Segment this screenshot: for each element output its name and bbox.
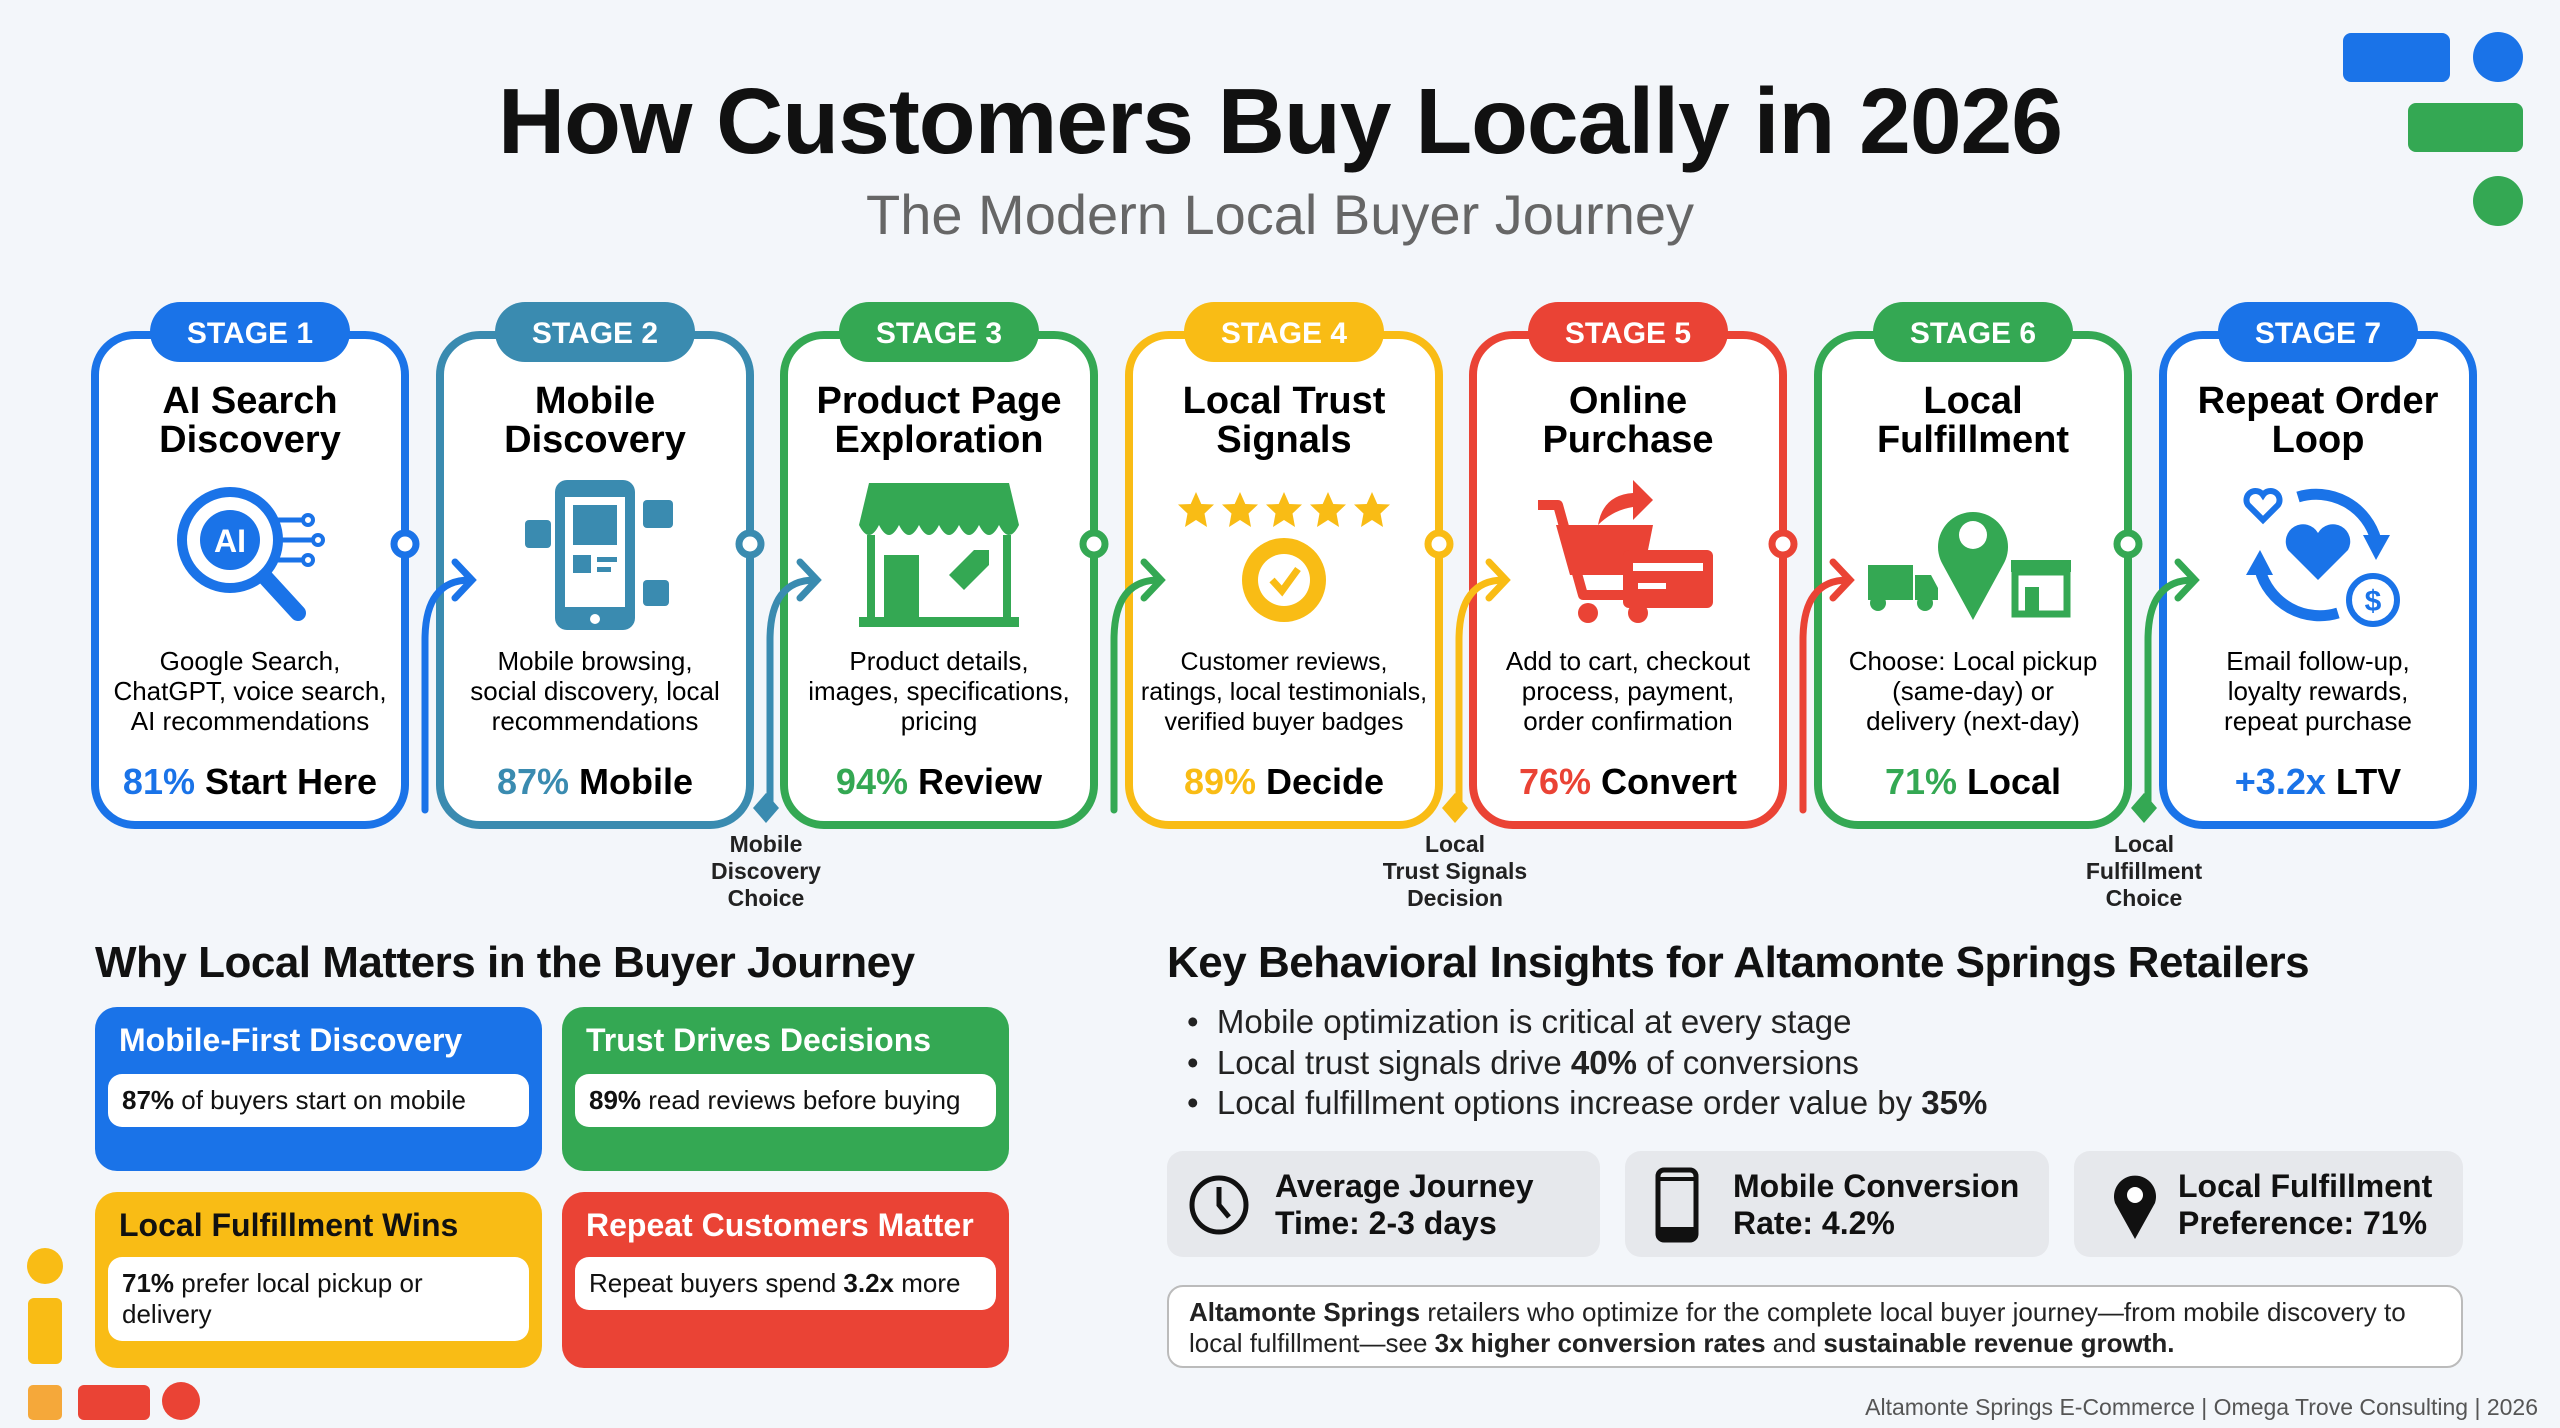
panel: repeat customers matter bbox=[562, 1192, 1009, 1368]
stage 7 card: Repeat Order bbox=[2198, 380, 2439, 422]
panel: local fulfillment wins bbox=[95, 1192, 542, 1368]
stage 7 card: Loop bbox=[2272, 419, 2364, 461]
subtitle: The Modern Local Buyer Journey bbox=[866, 183, 1694, 246]
stage 7 card: loyalty rewards, bbox=[2228, 676, 2408, 706]
stage 7 card bbox=[2163, 302, 2473, 825]
panel: local fulfillment wins: Local Fulfillment Wins bbox=[119, 1207, 458, 1243]
stage 5 card: 76% Convert bbox=[1519, 761, 1737, 802]
stage 6 card: Choose: Local pickup bbox=[1849, 646, 2097, 676]
stage 4 card: Customer reviews, bbox=[1180, 648, 1388, 676]
stat: average journey: Average Journey bbox=[1275, 1168, 1533, 1204]
stage 6 card: 71% Local bbox=[1885, 761, 2061, 802]
stat: mobile conversion: Rate: 4.2% bbox=[1733, 1205, 1895, 1241]
panel: repeat customers matter: Repeat buyers spend 3.2x more bbox=[589, 1268, 960, 1298]
stage 5 card: Purchase bbox=[1542, 419, 1714, 461]
title: How Customers Buy Locally in 2026 bbox=[498, 69, 2062, 173]
stage 1 card: 81% Start Here bbox=[123, 761, 377, 802]
decoration: top-right shapes bbox=[2343, 32, 2523, 226]
stage 2 card: STAGE 2 bbox=[532, 317, 658, 350]
stage 2 card bbox=[440, 302, 750, 825]
stage 6 card: (same-day) or bbox=[1892, 676, 2054, 706]
stage 1 card: AI Search bbox=[162, 380, 338, 422]
stage 2 card: 87% Mobile bbox=[497, 761, 693, 802]
stage 2 card: Mobile browsing, bbox=[497, 646, 693, 676]
stage 5 card: Online bbox=[1569, 380, 1687, 422]
stage 4 card: Local Trust bbox=[1183, 380, 1386, 422]
decision markers: Discovery bbox=[711, 858, 821, 884]
heading: why local matters: Why Local Matters in the Buyer Journey bbox=[95, 938, 915, 987]
stage 4 card bbox=[1129, 302, 1439, 825]
panel: repeat customers matter: Repeat Customers Matter bbox=[586, 1207, 974, 1243]
panel: local fulfillment wins: delivery bbox=[122, 1299, 212, 1329]
panel: trust drives decisions bbox=[562, 1007, 1009, 1171]
stage 4 card: verified buyer badges bbox=[1164, 708, 1404, 736]
decision markers: Fulfillment bbox=[2086, 858, 2202, 884]
stage 5 card: process, payment, bbox=[1522, 676, 1734, 706]
stage 1 card: STAGE 1 bbox=[187, 317, 313, 350]
stage 6 card bbox=[1818, 302, 2128, 825]
stage 5 card bbox=[1473, 302, 1783, 825]
stage 4 card: STAGE 4 bbox=[1221, 317, 1347, 350]
stage 4 card: 89% Decide bbox=[1184, 761, 1384, 802]
stage 6 card: STAGE 6 bbox=[1910, 317, 2036, 350]
stage 3 card: Exploration bbox=[834, 419, 1044, 461]
stat: mobile conversion: Mobile Conversion bbox=[1733, 1168, 2019, 1204]
panel: trust drives decisions: Trust Drives Decisions bbox=[586, 1022, 931, 1058]
stage 6 card: Fulfillment bbox=[1877, 419, 2069, 461]
heading: key behavioral insights: Key Behavioral Insights for Altamonte Springs Retailers bbox=[1167, 938, 2309, 987]
bullet list: • Local trust signals drive 40% of conversions bbox=[1187, 1044, 1859, 1080]
decision markers: Choice bbox=[728, 885, 804, 911]
stage 3 card: images, specifications, bbox=[808, 676, 1070, 706]
stat: local fulfillment: Local Fulfillment bbox=[2178, 1168, 2432, 1204]
decision markers: Choice bbox=[2106, 885, 2182, 911]
decision markers: Local bbox=[1425, 831, 1485, 857]
stage 3 card: Product Page bbox=[817, 380, 1061, 422]
stage 2 card: social discovery, local bbox=[470, 676, 720, 706]
decision markers: Local bbox=[2114, 831, 2174, 857]
stage 3 card: Product details, bbox=[849, 646, 1029, 676]
stage 3 card bbox=[784, 302, 1094, 825]
stage 1 card: ChatGPT, voice search, bbox=[113, 676, 387, 706]
stage 7 card: repeat purchase bbox=[2224, 706, 2412, 736]
stage 1 card: AI recommendations bbox=[131, 706, 369, 736]
stage 2 card: recommendations bbox=[492, 706, 698, 736]
callout: summary bbox=[1167, 1285, 2463, 1368]
stage 7 card: $ bbox=[2365, 585, 2382, 618]
stage 7 card: STAGE 7 bbox=[2255, 317, 2381, 350]
stat: local fulfillment: Preference: 71% bbox=[2178, 1205, 2427, 1241]
callout: summary: Altamonte Springs retailers who optimize for the complete local buyer journey—from mobile discovery to local fulfillment—see 3x higher conversion rates and sustainable revenue growth. bbox=[1189, 1297, 2406, 1358]
stage 3 card: STAGE 3 bbox=[876, 317, 1002, 350]
bullet list: • Mobile optimization is critical at every stage bbox=[1187, 1003, 1851, 1040]
stage 5 card: Add to cart, checkout bbox=[1506, 646, 1751, 676]
stage 1 card: Discovery bbox=[159, 419, 341, 461]
panel: trust drives decisions: 89% read reviews before buying bbox=[589, 1085, 960, 1115]
stat: local fulfillment bbox=[2074, 1151, 2463, 1257]
stage 1 card: AI bbox=[214, 523, 246, 559]
stage 4 card: ratings, local testimonials, bbox=[1141, 678, 1427, 706]
decision markers: Decision bbox=[1407, 885, 1503, 911]
footer: Altamonte Springs E-Commerce | Omega Trove Consulting | 2026 bbox=[1865, 1394, 2538, 1420]
panel: mobile-first discovery bbox=[95, 1007, 542, 1171]
stat: average journey: Time: 2-3 days bbox=[1275, 1205, 1497, 1241]
stage 3 card: pricing bbox=[901, 706, 977, 736]
stage 5 card: STAGE 5 bbox=[1565, 317, 1691, 350]
bullet list bbox=[1187, 1003, 1987, 1121]
stage 1 card bbox=[95, 302, 405, 825]
decision markers bbox=[711, 793, 2202, 911]
panel: mobile-first discovery: 87% of buyers start on mobile bbox=[122, 1085, 466, 1115]
stage 3 card: 94% Review bbox=[836, 761, 1043, 802]
stage journey bbox=[91, 302, 2477, 911]
stat: mobile conversion bbox=[1625, 1151, 2049, 1257]
decision markers: Trust Signals bbox=[1383, 858, 1527, 884]
connectors between stages bbox=[394, 533, 2195, 810]
decoration: bottom-left shapes bbox=[27, 1248, 200, 1420]
bullet list: • Local fulfillment options increase order value by 35% bbox=[1187, 1084, 1987, 1121]
stage 5 card: order confirmation bbox=[1523, 706, 1733, 736]
stat: average journey bbox=[1167, 1151, 1600, 1257]
stage 6 card: delivery (next-day) bbox=[1866, 706, 2080, 736]
stage 6 card: Local bbox=[1923, 380, 2023, 422]
panel: mobile-first discovery: Mobile-First Discovery bbox=[119, 1022, 462, 1058]
stage 7 card: +3.2x LTV bbox=[2235, 761, 2401, 802]
stage 2 card: Discovery bbox=[504, 419, 686, 461]
stage 2 card: Mobile bbox=[535, 380, 655, 422]
stage 1 card: Google Search, bbox=[160, 646, 340, 676]
stage 7 card: Email follow-up, bbox=[2226, 646, 2410, 676]
stage 4 card: Signals bbox=[1216, 419, 1352, 461]
decision markers: Mobile bbox=[730, 831, 802, 857]
panel: local fulfillment wins: 71% prefer local pickup or bbox=[122, 1268, 423, 1298]
